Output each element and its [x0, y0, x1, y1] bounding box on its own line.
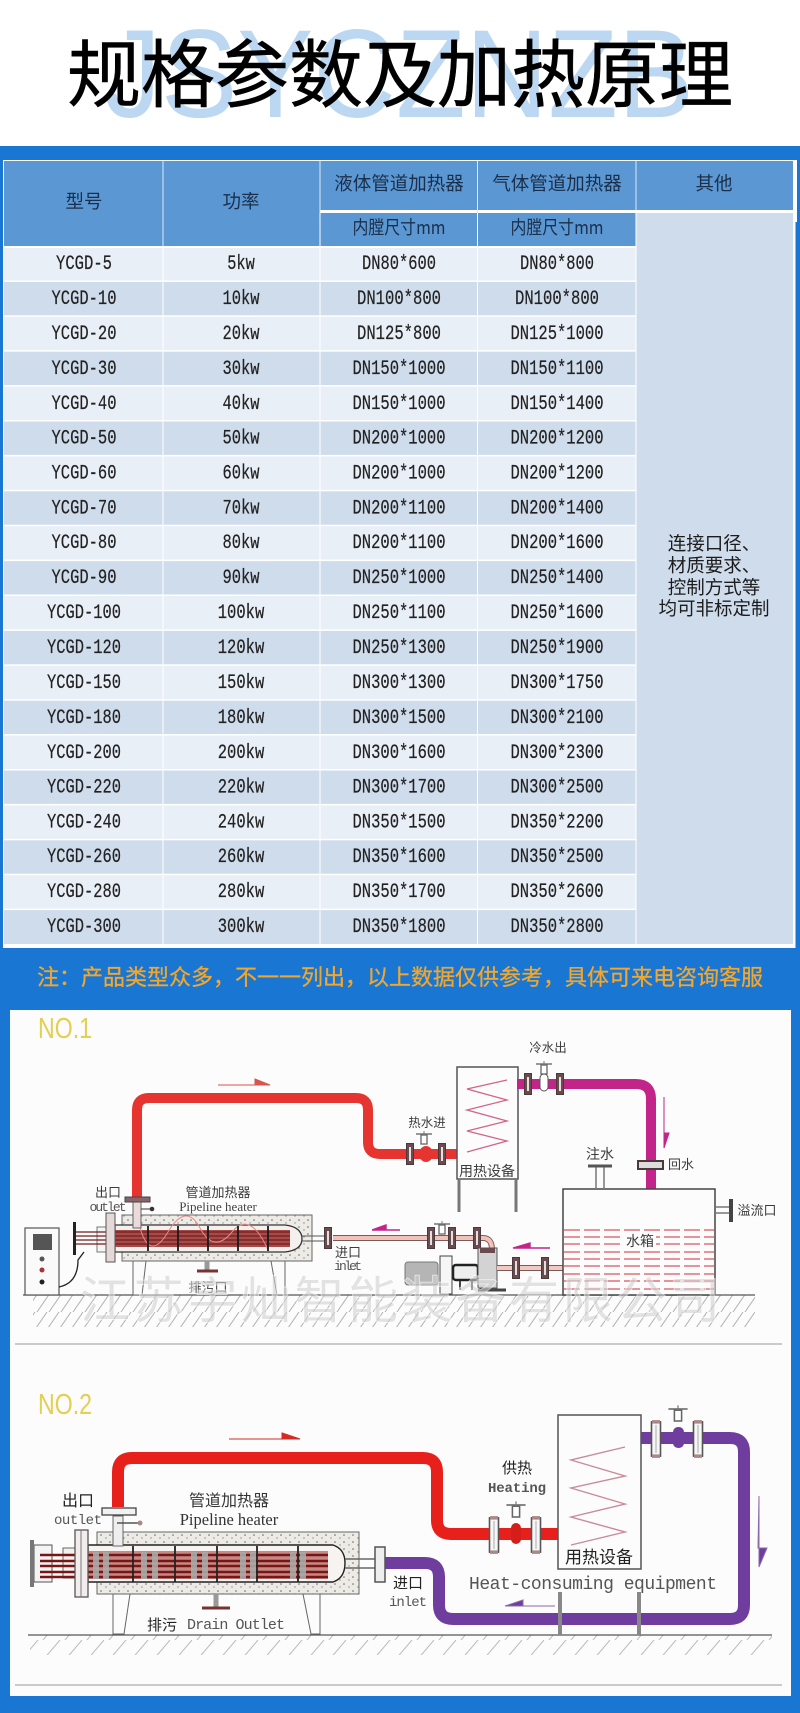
- inlet pipe, pump and valves: [324, 1221, 563, 1294]
- row YCGD-300: DN350*2800: [510, 916, 604, 939]
- flow arrow red: [218, 1079, 270, 1085]
- heat equipment 2: 用热设备: [565, 1543, 633, 1568]
- diagram 1 labels: outlet: [90, 1200, 126, 1215]
- merged note column: 材质要求、: [668, 552, 760, 578]
- row YCGD-180: DN300*2100: [510, 707, 604, 730]
- row YCGD-200: DN300*2300: [510, 742, 604, 765]
- row YCGD-280: 280kw: [218, 881, 264, 904]
- row YCGD-20: 20kw: [222, 323, 260, 346]
- row YCGD-40: DN150*1000: [352, 393, 446, 416]
- row YCGD-280: DN350*2600: [510, 881, 604, 904]
- row YCGD-120: YCGD-120: [47, 637, 121, 660]
- row YCGD-220: DN300*1700: [352, 776, 446, 800]
- ground and hatching: [23, 1295, 755, 1327]
- row YCGD-60: DN200*1000: [352, 462, 446, 486]
- row YCGD-180: [4, 701, 636, 734]
- diagram NO.2: [15, 1389, 782, 1685]
- row YCGD-5: [4, 248, 636, 280]
- row YCGD-60: YCGD-60: [52, 462, 116, 486]
- row YCGD-200: YCGD-200: [47, 742, 121, 765]
- pipeline heater 1: [73, 1197, 325, 1295]
- diagram 2 labels: inlet: [389, 1595, 427, 1611]
- row YCGD-40: YCGD-40: [52, 393, 116, 416]
- row YCGD-5: 5kw: [227, 253, 255, 276]
- row YCGD-50: 50kw: [222, 428, 260, 450]
- magenta return pipe: [517, 1084, 651, 1189]
- row YCGD-150: DN300*1300: [352, 672, 446, 695]
- diagram 1 labels: 热水进: [408, 1112, 446, 1131]
- row YCGD-30: DN150*1100: [510, 358, 604, 381]
- specification table: [3, 160, 797, 948]
- row YCGD-260: DN350*1600: [352, 846, 446, 869]
- row YCGD-30: [4, 352, 636, 385]
- row YCGD-240: DN350*2200: [510, 812, 604, 834]
- return arrow: [664, 1097, 669, 1148]
- row YCGD-180: 180kw: [218, 707, 264, 730]
- control box: [25, 1228, 84, 1295]
- company watermark: 江苏宇灿智能装备有限公司: [80, 1261, 720, 1333]
- row YCGD-90: DN250*1400: [510, 567, 604, 590]
- row YCGD-280: [4, 875, 636, 909]
- row YCGD-150: YCGD-150: [47, 672, 121, 695]
- diagram 2 labels: 出口: [62, 1487, 94, 1511]
- footnote: 注：产品类型众多，不一一列出，以上数据仅供参考，具体可来电咨询客服: [37, 960, 763, 992]
- diagram 2 labels: 进口: [393, 1572, 423, 1593]
- row YCGD-70: DN200*1400: [510, 498, 604, 520]
- row YCGD-20: DN125*1000: [510, 323, 604, 346]
- diagram 1 labels: 排污口: [188, 1277, 228, 1296]
- row YCGD-50: DN200*1200: [510, 428, 604, 450]
- return valve: [652, 1405, 702, 1458]
- heading NO.2: NO.2: [38, 1389, 92, 1421]
- table header: 其他: [695, 170, 733, 196]
- row YCGD-300: DN350*1800: [352, 916, 446, 939]
- row YCGD-40: DN150*1400: [510, 393, 604, 416]
- row YCGD-180: DN300*1500: [352, 707, 446, 730]
- row YCGD-60: DN200*1200: [510, 462, 604, 486]
- row YCGD-180: YCGD-180: [47, 707, 121, 730]
- diagram 2 labels: 供热: [502, 1457, 532, 1478]
- diagram 1 labels: Pipeline heater: [179, 1199, 257, 1214]
- table header: 内膛尺寸mm: [510, 214, 604, 240]
- diagram 1 labels: inlet: [334, 1259, 362, 1274]
- purple return pipe: [385, 1438, 744, 1619]
- separator 1: [15, 1343, 782, 1345]
- row YCGD-260: DN350*2500: [510, 846, 604, 869]
- hot water valve: [406, 1131, 446, 1164]
- row YCGD-70: [4, 491, 636, 525]
- water tank: 水箱: [626, 1231, 654, 1251]
- heat equipment 1: 用热设备: [459, 1161, 515, 1181]
- inlet arrows: [372, 1225, 550, 1248]
- row YCGD-300: 300kw: [218, 916, 264, 939]
- diagram 2 labels: 管道加热器: [189, 1487, 269, 1511]
- table header: 内膛尺寸mm: [352, 214, 446, 240]
- row YCGD-50: [4, 422, 636, 455]
- row YCGD-220: YCGD-220: [47, 776, 121, 800]
- row YCGD-200: [4, 736, 636, 769]
- diagram 2 labels: Heating: [488, 1481, 546, 1497]
- row YCGD-80: DN200*1100: [352, 532, 446, 555]
- row YCGD-40: 40kw: [222, 393, 260, 416]
- merged note column: [636, 213, 793, 944]
- table header: 功率: [222, 188, 260, 214]
- table header: 液体管道加热器: [334, 170, 464, 196]
- diagram 1 labels: 管道加热器: [185, 1182, 251, 1201]
- row YCGD-100: DN250*1100: [352, 602, 446, 625]
- row YCGD-150: DN300*1750: [510, 672, 604, 695]
- row YCGD-80: 80kw: [222, 532, 260, 555]
- red hot water pipe: [137, 1098, 457, 1197]
- row YCGD-260: 260kw: [218, 846, 264, 869]
- cold water valve: [524, 1061, 564, 1094]
- row YCGD-240: YCGD-240: [47, 812, 121, 834]
- merged note column: 连接口径、: [668, 530, 760, 556]
- diagram 1 labels: 冷水出: [529, 1037, 567, 1056]
- row YCGD-100: YCGD-100: [47, 602, 121, 625]
- diagram NO.1: [15, 1013, 782, 1344]
- row YCGD-50: YCGD-50: [52, 428, 116, 450]
- row YCGD-10: 10kw: [222, 288, 260, 311]
- row YCGD-30: DN150*1000: [352, 358, 446, 381]
- row YCGD-20: YCGD-20: [52, 323, 116, 346]
- row YCGD-120: DN250*1300: [352, 637, 446, 660]
- row YCGD-240: [4, 805, 636, 839]
- diagram 2 labels: [54, 1457, 717, 1635]
- row YCGD-220: 220kw: [218, 776, 264, 800]
- row YCGD-90: DN250*1000: [352, 567, 446, 590]
- row YCGD-100: DN250*1600: [510, 602, 604, 625]
- watermark text: JSYCZNZB: [104, 5, 694, 144]
- red heating pipe: [118, 1458, 558, 1534]
- row YCGD-60: [4, 456, 636, 490]
- row YCGD-200: DN300*1600: [352, 742, 446, 765]
- row YCGD-240: 240kw: [218, 812, 264, 834]
- row YCGD-5: DN80*600: [362, 253, 436, 276]
- row YCGD-90: 90kw: [222, 567, 260, 590]
- heating valve: [490, 1501, 540, 1554]
- row YCGD-280: DN350*1700: [352, 881, 446, 904]
- merged note column: 均可非标定制: [658, 595, 770, 621]
- water tank: [563, 1166, 733, 1295]
- heading NO.1: NO.1: [38, 1013, 92, 1045]
- title: 规格参数及加热原理: [67, 16, 733, 123]
- row YCGD-80: [4, 526, 636, 560]
- row YCGD-300: [4, 910, 636, 944]
- row YCGD-5: DN80*800: [520, 253, 594, 276]
- diagram 2 labels: Pipeline heater: [180, 1510, 279, 1529]
- table header: 气体管道加热器: [492, 170, 622, 196]
- row YCGD-20: [4, 317, 636, 350]
- table frame: [3, 160, 797, 948]
- row YCGD-80: YCGD-80: [52, 532, 116, 555]
- return arrows: [505, 1496, 767, 1606]
- row YCGD-40: [4, 387, 636, 420]
- diagram 1 labels: 注水: [586, 1144, 614, 1164]
- row YCGD-300: YCGD-300: [47, 916, 121, 939]
- row YCGD-260: YCGD-260: [47, 846, 121, 869]
- row YCGD-20: DN125*800: [357, 323, 441, 346]
- diagram 1 labels: [90, 1037, 777, 1296]
- diagram 2 labels: outlet: [54, 1513, 102, 1529]
- row YCGD-10: [4, 282, 636, 315]
- table header: 型号: [65, 188, 103, 214]
- diagram 2 labels: Heat-consuming equipment: [469, 1575, 717, 1595]
- heat equipment 1: [457, 1067, 518, 1212]
- table header: [4, 161, 793, 246]
- row YCGD-70: DN200*1100: [352, 498, 446, 520]
- row YCGD-220: [4, 770, 636, 804]
- row YCGD-240: DN350*1500: [352, 812, 446, 834]
- row YCGD-120: [4, 631, 636, 664]
- row YCGD-150: 150kw: [218, 672, 264, 695]
- row YCGD-5: YCGD-5: [56, 253, 112, 276]
- row YCGD-120: 120kw: [218, 637, 264, 660]
- row YCGD-90: YCGD-90: [52, 567, 116, 590]
- pipeline heater 2: [30, 1508, 385, 1634]
- diagram 2 labels: Drain Outlet: [187, 1617, 285, 1634]
- row YCGD-30: YCGD-30: [52, 358, 116, 381]
- row YCGD-10: YCGD-10: [52, 288, 116, 311]
- separator 2: [15, 1684, 782, 1686]
- row YCGD-80: DN200*1600: [510, 532, 604, 555]
- row YCGD-30: 30kw: [222, 358, 260, 381]
- row YCGD-10: DN100*800: [357, 288, 441, 311]
- diagram 1 labels: 回水: [668, 1154, 694, 1173]
- diagram 2 labels: 排污: [147, 1614, 177, 1635]
- diagram 1 labels: 溢流口: [737, 1200, 777, 1219]
- return flange: [638, 1161, 663, 1169]
- merged note column: 控制方式等: [668, 574, 760, 600]
- ground 2: [28, 1635, 772, 1655]
- row YCGD-60: 60kw: [222, 462, 260, 486]
- row YCGD-90: [4, 561, 636, 594]
- title section: [67, 5, 733, 144]
- row YCGD-200: 200kw: [218, 742, 264, 765]
- flow arrow top: [229, 1433, 300, 1439]
- diagram 1 labels: 进口: [335, 1242, 361, 1261]
- row YCGD-100: 100kw: [218, 602, 264, 625]
- row YCGD-150: [4, 666, 636, 699]
- principle diagram panel: [10, 1010, 791, 1696]
- row YCGD-70: 70kw: [222, 498, 260, 520]
- row YCGD-120: DN250*1900: [510, 637, 604, 660]
- row YCGD-10: DN100*800: [515, 288, 599, 311]
- diagram 1 labels: 出口: [95, 1182, 121, 1201]
- heat equipment 2: [558, 1415, 641, 1635]
- row YCGD-100: [4, 596, 636, 629]
- row YCGD-260: [4, 840, 636, 874]
- row YCGD-220: DN300*2500: [510, 776, 604, 800]
- row YCGD-70: YCGD-70: [52, 498, 116, 520]
- row YCGD-50: DN200*1000: [352, 428, 446, 450]
- row YCGD-280: YCGD-280: [47, 881, 121, 904]
- panel background: [10, 1010, 791, 1696]
